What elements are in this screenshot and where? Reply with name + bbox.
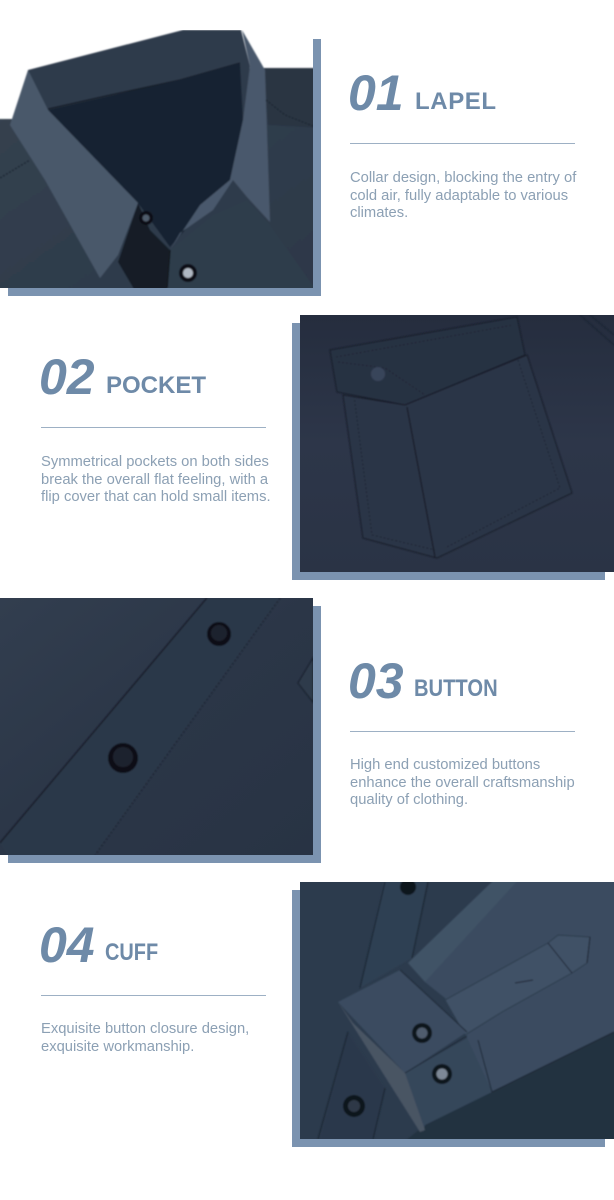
text: pocket description: flip cover that can hold small items. bbox=[41, 489, 271, 505]
photo: shirt cuff bbox=[300, 882, 614, 1139]
title POCKET: POCKET bbox=[106, 372, 206, 399]
number 04: 04 bbox=[39, 917, 95, 973]
number 03: 03 bbox=[348, 653, 404, 709]
text: lapel description: cold air, fully adaptable to various bbox=[350, 188, 568, 204]
number 01: 01 bbox=[348, 65, 404, 121]
text: button description: enhance the overall craftsmanship bbox=[350, 775, 575, 791]
panel: lapel photo bbox=[0, 30, 321, 296]
heading: 02 pocket bbox=[39, 349, 206, 405]
text: cuff description bbox=[41, 1021, 249, 1055]
panel: button photo bbox=[0, 598, 321, 863]
title LAPEL: LAPEL bbox=[415, 88, 497, 115]
text: pocket description: Symmetrical pockets on both sides bbox=[41, 454, 269, 470]
photo: shirt pocket bbox=[300, 315, 614, 572]
text: cuff description: Exquisite button closure design, bbox=[41, 1021, 249, 1037]
text: button description: quality of clothing. bbox=[350, 792, 468, 808]
panel: cuff photo bbox=[292, 882, 614, 1147]
text: button description: High end customized buttons bbox=[350, 757, 540, 773]
photo shadow block bbox=[8, 39, 321, 296]
text: button description bbox=[350, 757, 575, 808]
heading: 04 cuff bbox=[39, 917, 158, 973]
photo: shirt buttons bbox=[0, 598, 313, 855]
text: lapel description: Collar design, blocking the entry of bbox=[350, 170, 576, 186]
photo: shirt collar bbox=[0, 30, 313, 288]
panel: pocket photo bbox=[292, 315, 614, 580]
photo shadow block bbox=[292, 890, 605, 1147]
photo shadow block bbox=[8, 606, 321, 863]
heading: 01 lapel bbox=[348, 65, 497, 121]
text: pocket description bbox=[41, 454, 271, 505]
text: cuff description: exquisite workmanship. bbox=[41, 1039, 194, 1055]
heading: 03 button bbox=[348, 653, 498, 709]
title CUFF: CUFF bbox=[105, 939, 158, 966]
number 02: 02 bbox=[39, 349, 95, 405]
text: pocket description: break the overall flat feeling, with a bbox=[41, 472, 268, 488]
title BUTTON: BUTTON bbox=[414, 675, 498, 702]
text: lapel description bbox=[350, 170, 576, 221]
photo shadow block bbox=[292, 323, 605, 580]
text: lapel description: climates. bbox=[350, 205, 408, 221]
